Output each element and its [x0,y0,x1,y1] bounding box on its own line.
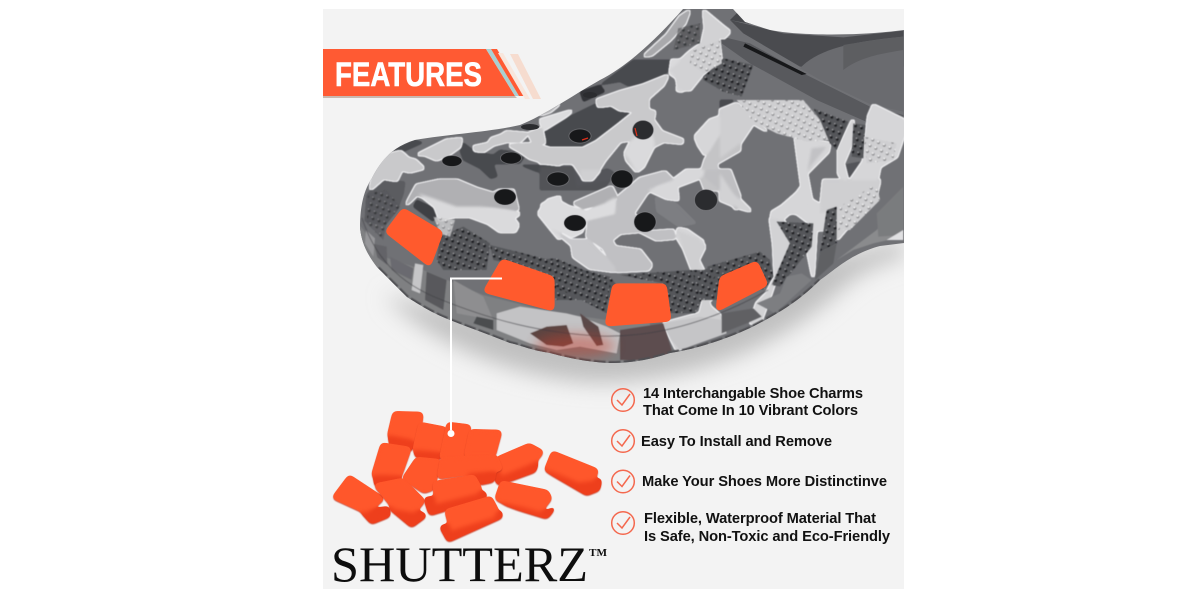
checklist item 1: 14 Interchangable Shoe Charms [643,386,863,402]
checklist item 2 [612,430,832,452]
textured dotted bands [367,23,897,313]
panel: light grey product background [323,9,904,589]
loose shutter charms pile [333,413,601,541]
checklist item 1: That Come In 10 Vibrant Colors [643,403,858,419]
features banner [323,49,541,99]
checklist item 4 [612,511,891,545]
shoe collar, interior and strap [722,13,904,122]
camo patches: light tones [370,10,904,350]
brand wordmark: TM [589,548,608,559]
checklist item 1 [612,386,863,419]
translucent sole band [358,187,903,367]
checklist item 4: Is Safe, Non-Toxic and Eco-Friendly [644,529,891,545]
checklist item 4: Flexible, Waterproof Material That [644,511,876,527]
checklist item 3: Make Your Shoes More Distinctinve [642,474,887,490]
camo patches: dark tones [365,60,862,227]
ventilation holes [442,92,718,232]
red glints in holes [582,128,637,140]
shoe charms installed on the toe [385,208,768,326]
brand wordmark: SHUTTERZ [331,536,588,592]
shoe illustration with camo pattern [340,0,910,370]
leader line from charm to pile [448,278,502,437]
checklist item 2: Easy To Install and Remove [641,434,832,450]
checklist item 3 [612,470,887,493]
red reflection on sole [535,334,615,358]
features banner: FEATURES [335,56,482,94]
ground shadow under shoe [385,240,904,383]
